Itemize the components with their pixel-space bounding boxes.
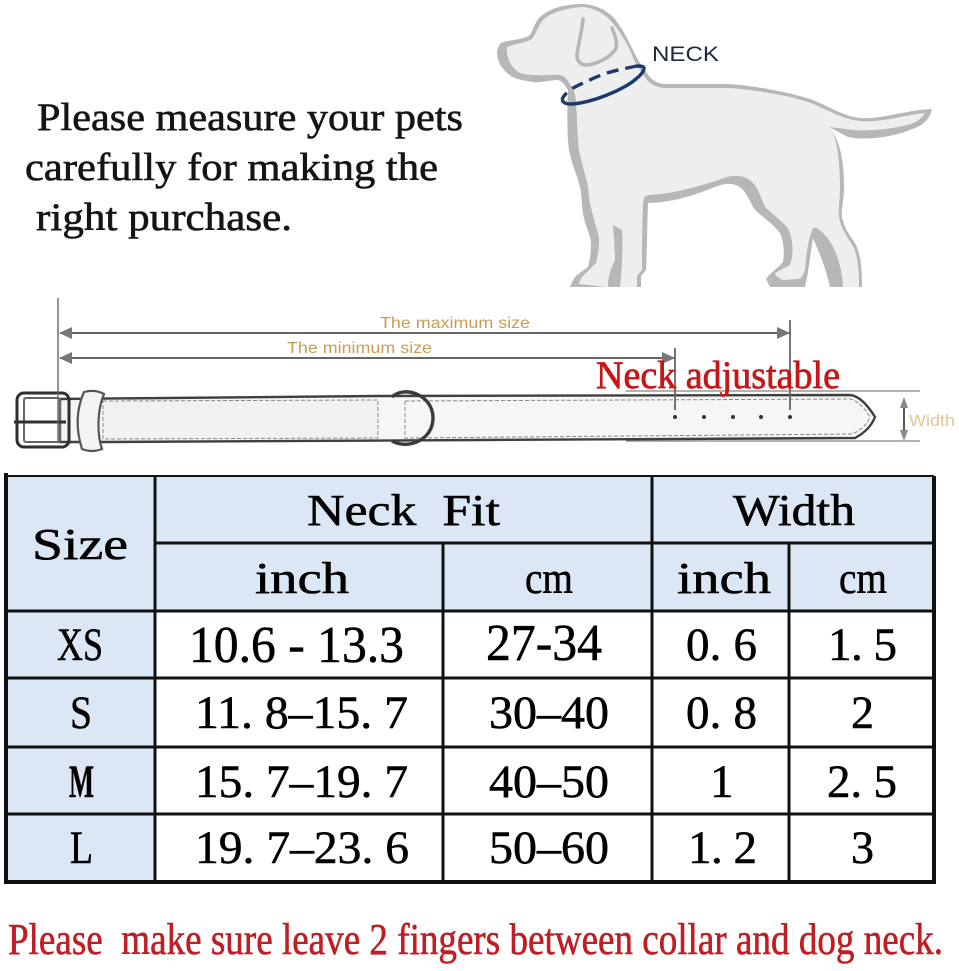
collar buckle [14, 393, 69, 447]
table row: XS: 10.6 - 13.3 [189, 617, 404, 674]
table row: M: 40–50 [489, 756, 609, 808]
label: maximum size: The maximum size [380, 315, 530, 332]
diagram: collar with size annotations [14, 298, 955, 451]
icon: dog silhouette with neck measurement [497, 4, 932, 287]
table row: L [70, 822, 874, 874]
table row: S: 0. 8 [686, 687, 757, 739]
table row: XS: XS [57, 619, 103, 671]
label: neck: NECK [652, 43, 719, 66]
table row: XS: 27-34 [486, 615, 602, 672]
table row: M: 2. 5 [827, 756, 897, 808]
table row: L: 1. 2 [688, 822, 757, 874]
table row: S: 30–40 [489, 687, 609, 739]
table header labels [32, 486, 887, 603]
heading: measurement instruction: right purchase. [36, 196, 292, 239]
heading: measurement instruction: carefully for making the [25, 146, 438, 189]
table row: L: 3 [851, 822, 874, 874]
size table [4, 473, 936, 884]
table header labels: Neck Fit [307, 486, 500, 535]
table row: L: 50–60 [489, 822, 609, 874]
label: minimum size: The minimum size [287, 340, 432, 357]
table row: M: 15. 7–19. 7 [195, 756, 408, 808]
table row: S: 2 [851, 687, 874, 739]
width arrow [900, 397, 908, 441]
table header fill [6, 477, 934, 881]
table header labels: inch [255, 554, 349, 603]
icon: collar ellipse around neck [562, 66, 644, 104]
collar holes [673, 415, 792, 419]
table row: S: 11. 8–15. 7 [195, 687, 408, 739]
table row: M [69, 756, 897, 808]
table row: XS: 0. 6 [686, 619, 757, 671]
table header labels: Width [733, 486, 855, 535]
collar D ring [392, 392, 433, 444]
heading: measurement instruction: Please measure your pets [37, 96, 463, 139]
collar strap [60, 395, 875, 442]
table row: L: L [70, 822, 93, 874]
table row: S: S [70, 687, 92, 739]
table grid [4, 473, 936, 884]
label: neck adjustable: Neck adjustable [596, 354, 840, 397]
table header labels: cm [839, 554, 887, 603]
measurement arrows [58, 298, 920, 441]
table row: M: 1 [710, 756, 734, 808]
label: width: Width [909, 411, 955, 430]
table header labels: Size [32, 520, 128, 569]
table row: XS [57, 615, 897, 674]
table row: S [70, 687, 874, 739]
heading: measurement instruction [25, 96, 463, 239]
collar keeper loop [78, 391, 104, 451]
table header labels: cm [525, 554, 573, 603]
table row: L: 19. 7–23. 6 [195, 822, 409, 874]
table row: M: M [69, 756, 94, 808]
table header labels: inch [677, 554, 771, 603]
table row: XS: 1. 5 [828, 619, 897, 671]
